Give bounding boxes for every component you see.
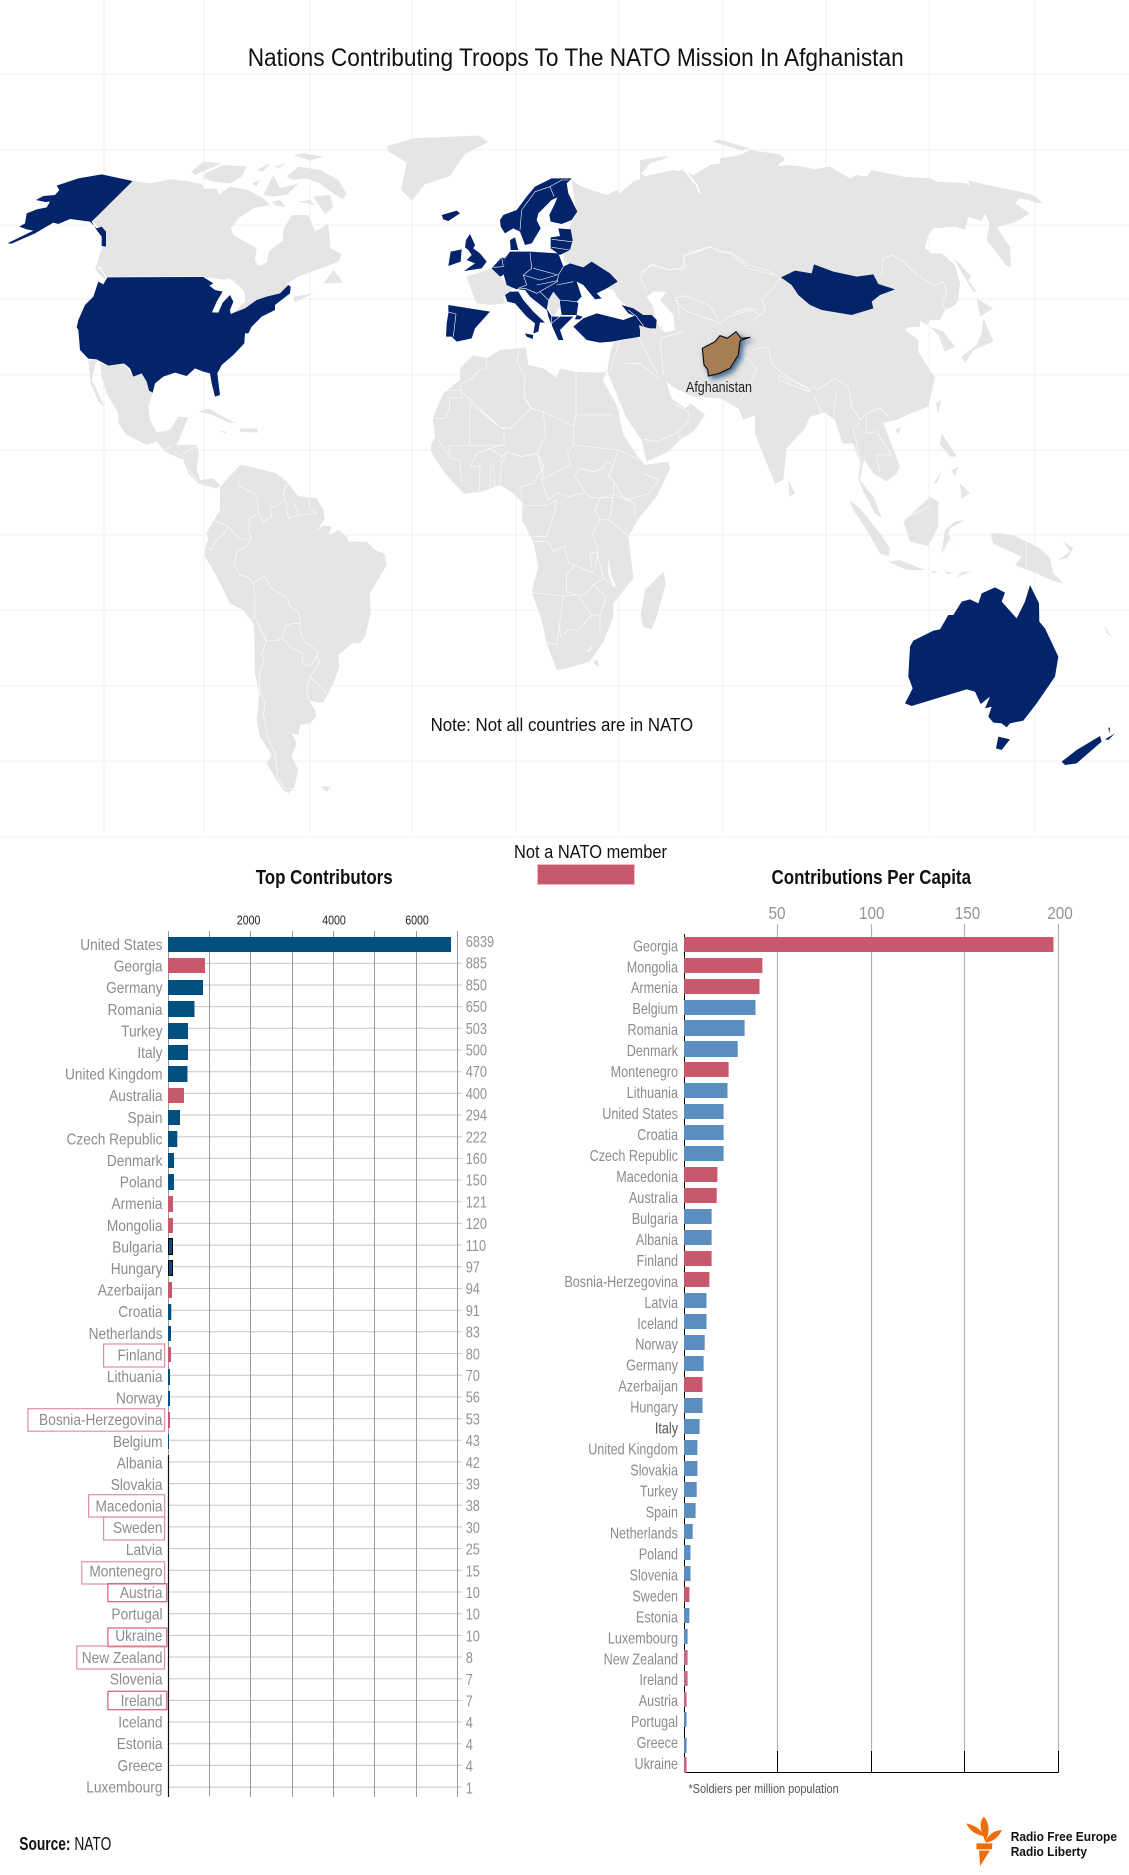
country labels: Austria bbox=[639, 1692, 678, 1709]
axis labels: 100 bbox=[859, 903, 884, 923]
country labels: Georgia bbox=[114, 959, 163, 976]
country labels: Australia bbox=[109, 1088, 163, 1105]
troop values: 53 bbox=[466, 1411, 480, 1429]
country labels: Ukraine bbox=[115, 1628, 162, 1645]
Afghanistan highlight bbox=[702, 332, 750, 376]
country labels: Mongolia bbox=[107, 1218, 163, 1235]
troop values: 7 bbox=[466, 1672, 473, 1689]
country labels: Australia bbox=[629, 1189, 678, 1206]
country labels: Turkey bbox=[640, 1482, 679, 1500]
country labels: New Zealand bbox=[604, 1650, 678, 1668]
country labels: Greece bbox=[118, 1758, 162, 1775]
country labels: Czech Republic bbox=[66, 1132, 162, 1149]
Inland seas bbox=[577, 247, 773, 332]
panel: contributions per capita chart bbox=[564, 903, 1073, 1773]
country labels: Germany bbox=[626, 1356, 679, 1374]
troop values: 121 bbox=[466, 1194, 487, 1212]
troop values: 25 bbox=[466, 1541, 480, 1559]
country labels: Poland bbox=[639, 1545, 678, 1563]
troop values: 91 bbox=[466, 1303, 480, 1320]
troop values: 500 bbox=[466, 1042, 487, 1060]
country labels: Portugal bbox=[631, 1713, 678, 1730]
pink boxes: non-NATO countries bbox=[28, 1344, 167, 1710]
troop values: 15 bbox=[466, 1563, 480, 1581]
troop values: 1 bbox=[466, 1780, 473, 1798]
country labels: Norway bbox=[635, 1335, 679, 1353]
South America bbox=[205, 465, 387, 793]
troop values: 222 bbox=[466, 1129, 487, 1147]
troop values: 470 bbox=[466, 1064, 487, 1082]
country labels: Albania bbox=[117, 1456, 163, 1473]
troop values: 42 bbox=[466, 1455, 480, 1472]
country labels: Sweden bbox=[113, 1520, 162, 1537]
country labels: Iceland bbox=[637, 1315, 678, 1332]
country labels: Finland bbox=[118, 1348, 162, 1365]
country labels: Montenegro bbox=[89, 1564, 162, 1581]
footnote: *Soldiers per million population bbox=[688, 1782, 839, 1796]
country labels: Estonia bbox=[636, 1608, 678, 1626]
country labels: Netherlands bbox=[610, 1524, 678, 1542]
country labels: Greece bbox=[637, 1734, 678, 1751]
panel: top contributors chart bbox=[28, 914, 494, 1798]
country labels: Portugal bbox=[111, 1607, 162, 1624]
country labels: Denmark bbox=[107, 1153, 163, 1170]
country labels: Turkey bbox=[121, 1024, 163, 1041]
country labels: Sweden bbox=[632, 1587, 678, 1605]
bars bbox=[168, 937, 451, 1797]
logo wordmark bbox=[1011, 1830, 1117, 1859]
world map bbox=[7, 136, 1115, 793]
axis labels bbox=[768, 903, 1073, 923]
country labels: Luxembourg bbox=[608, 1629, 678, 1647]
country labels: Bosnia-Herzegovina bbox=[564, 1273, 678, 1290]
country labels: Spain bbox=[646, 1503, 678, 1521]
country labels: Lithuania bbox=[627, 1084, 678, 1101]
country labels: Spain bbox=[127, 1110, 162, 1127]
country labels: Italy bbox=[655, 1419, 679, 1437]
troop values: 850 bbox=[466, 977, 487, 995]
country labels: Slovakia bbox=[111, 1477, 163, 1494]
country labels: Ireland bbox=[639, 1671, 678, 1688]
country labels: Belgium bbox=[113, 1434, 162, 1451]
logo wordmark: Radio Free Europe bbox=[1011, 1830, 1117, 1844]
top axis labels bbox=[237, 914, 429, 928]
country labels: Netherlands bbox=[89, 1326, 162, 1343]
heading: top contributors: Top Contributors bbox=[256, 867, 393, 889]
Central Asia borders bbox=[640, 247, 947, 320]
Russia and northern Asia bbox=[640, 139, 1042, 320]
top axis labels: 2000 bbox=[237, 914, 260, 928]
country labels: United Kingdom bbox=[65, 1067, 162, 1084]
troop values: 80 bbox=[466, 1346, 480, 1364]
country labels bbox=[39, 937, 163, 1797]
top axis labels: 6000 bbox=[405, 914, 429, 928]
Greenland bbox=[387, 136, 488, 201]
map note: Note: Not all countries are in NATO bbox=[431, 714, 693, 735]
troop values bbox=[466, 934, 494, 1798]
troop values: 650 bbox=[466, 999, 487, 1017]
country labels: Norway bbox=[116, 1391, 163, 1408]
country labels: Belgium bbox=[632, 1000, 678, 1017]
troop values: 294 bbox=[466, 1107, 487, 1125]
map label: Afghanistan: Afghanistan bbox=[686, 379, 752, 396]
country labels: United States bbox=[80, 937, 162, 954]
axis labels: 50 bbox=[768, 903, 786, 923]
logo: Radio Free Europe / Radio Liberty bbox=[966, 1817, 1117, 1866]
South and East Asia bbox=[620, 300, 1112, 637]
country labels: Azerbaijan bbox=[618, 1377, 678, 1395]
country labels: Romania bbox=[627, 1021, 678, 1038]
country labels bbox=[564, 937, 679, 1772]
troop values: 94 bbox=[466, 1281, 480, 1299]
top axis labels: 4000 bbox=[322, 914, 346, 928]
country labels: Slovakia bbox=[630, 1461, 678, 1479]
troop values: 160 bbox=[466, 1151, 487, 1168]
country labels: Mongolia bbox=[627, 958, 678, 976]
country labels: Latvia bbox=[126, 1542, 163, 1559]
Contributing countries: Europe, Turkey and Mongolia bbox=[442, 178, 895, 343]
country labels: Finland bbox=[637, 1252, 678, 1269]
country labels: Bosnia-Herzegovina bbox=[39, 1412, 163, 1429]
troop values: 39 bbox=[466, 1476, 480, 1494]
troop values: 8 bbox=[466, 1650, 473, 1668]
troop values: 150 bbox=[466, 1172, 487, 1190]
troop values: 30 bbox=[466, 1520, 480, 1537]
country labels: United States bbox=[602, 1105, 678, 1122]
country labels: Hungary bbox=[111, 1261, 163, 1278]
country labels: Austria bbox=[120, 1585, 163, 1602]
country labels: Ireland bbox=[121, 1693, 162, 1710]
troop values: 6839 bbox=[466, 934, 494, 951]
troop values: 400 bbox=[466, 1086, 487, 1103]
country labels: Italy bbox=[137, 1045, 163, 1062]
troop values: 10 bbox=[466, 1628, 480, 1646]
troop values: 56 bbox=[466, 1389, 480, 1407]
Contributing countries: USA bbox=[7, 174, 291, 397]
icon: orange torch bbox=[966, 1817, 1002, 1866]
country labels: Croatia bbox=[637, 1126, 678, 1143]
troop values: 83 bbox=[466, 1324, 480, 1342]
troop values: 70 bbox=[466, 1368, 480, 1385]
country labels: Germany bbox=[106, 980, 163, 997]
troop values: 4 bbox=[466, 1758, 473, 1776]
troop values: 885 bbox=[466, 955, 487, 973]
axis labels: 200 bbox=[1047, 903, 1073, 923]
country labels: Albania bbox=[636, 1231, 678, 1248]
country labels: Iceland bbox=[118, 1715, 162, 1732]
troop values: 110 bbox=[466, 1238, 486, 1255]
country labels: Latvia bbox=[644, 1294, 678, 1311]
country labels: Bulgaria bbox=[112, 1240, 163, 1257]
Contributing countries: Australia and New Zealand bbox=[905, 585, 1115, 765]
Africa and Arabia bbox=[431, 340, 705, 670]
country labels: Azerbaijan bbox=[98, 1283, 162, 1300]
source: Source: NATO bbox=[19, 1834, 111, 1854]
country labels: Estonia bbox=[117, 1736, 163, 1753]
country labels: Montenegro bbox=[611, 1063, 678, 1080]
troop values: 10 bbox=[466, 1585, 480, 1602]
troop values: 38 bbox=[466, 1498, 480, 1516]
axis labels: 150 bbox=[955, 903, 980, 923]
country labels: Luxembourg bbox=[86, 1780, 162, 1797]
country labels: United Kingdom bbox=[588, 1440, 678, 1458]
heading: contributions per capita: Contributions Per Capita bbox=[772, 867, 972, 889]
country labels: Macedonia bbox=[616, 1168, 678, 1185]
legend: not a NATO member: Not a NATO member bbox=[514, 841, 667, 862]
title: Nations Contributing Troops To The NATO Mission In Afghanistan bbox=[248, 44, 904, 72]
legend: not a NATO member bbox=[514, 841, 667, 884]
country labels: Macedonia bbox=[95, 1499, 163, 1516]
bars bbox=[684, 937, 1054, 1773]
country labels: Denmark bbox=[627, 1042, 679, 1059]
country labels: Croatia bbox=[118, 1304, 163, 1321]
country labels: Hungary bbox=[630, 1398, 679, 1416]
North America land bbox=[88, 153, 347, 488]
country labels: Slovenia bbox=[630, 1566, 678, 1584]
troop values: 4 bbox=[466, 1715, 473, 1733]
troop values: 10 bbox=[466, 1606, 480, 1624]
troop values: 120 bbox=[466, 1216, 487, 1234]
country labels: Georgia bbox=[633, 937, 678, 955]
troop values: 503 bbox=[466, 1021, 487, 1038]
country labels: Ukraine bbox=[635, 1755, 678, 1772]
West Russia and Central Europe land bbox=[467, 170, 920, 347]
troop values: 7 bbox=[466, 1693, 473, 1711]
country labels: Romania bbox=[108, 1002, 163, 1019]
country labels: Slovenia bbox=[110, 1672, 163, 1689]
troop values: 43 bbox=[466, 1433, 480, 1451]
country labels: New Zealand bbox=[82, 1650, 162, 1667]
country labels: Bulgaria bbox=[632, 1210, 678, 1227]
country labels: Armenia bbox=[111, 1196, 163, 1213]
country labels: Czech Republic bbox=[590, 1147, 678, 1164]
country labels: Poland bbox=[120, 1175, 162, 1192]
troop values: 97 bbox=[466, 1259, 480, 1277]
country labels: Lithuania bbox=[107, 1369, 163, 1386]
logo wordmark: Radio Liberty bbox=[1011, 1845, 1087, 1859]
country labels: Armenia bbox=[631, 979, 678, 996]
troop values: 4 bbox=[466, 1737, 473, 1754]
